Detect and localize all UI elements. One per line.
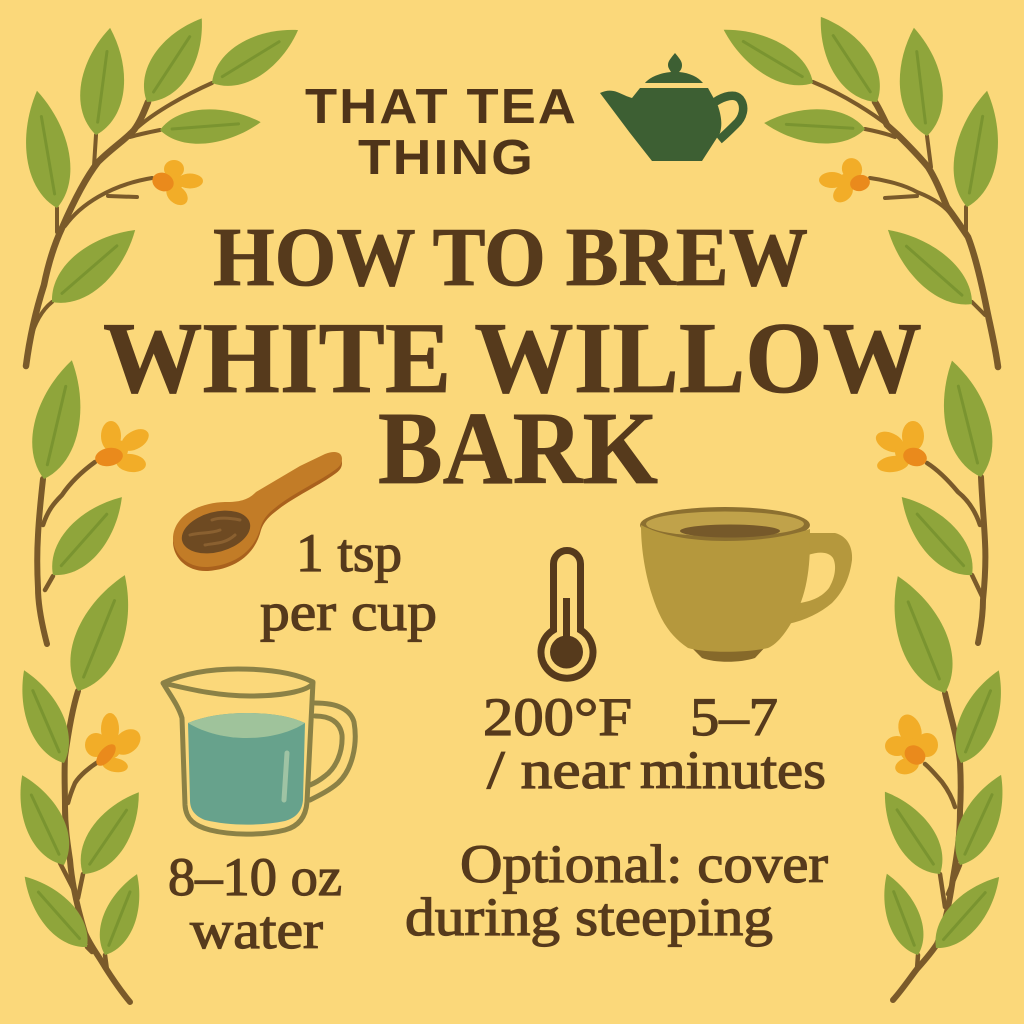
label: water amount: water (190, 900, 323, 960)
sprig: bottom right (869, 567, 1017, 1000)
icon: cup of tea (640, 507, 852, 662)
label: water amount (168, 847, 342, 960)
label: steeping time: 5–7 (690, 687, 778, 747)
sprig: top left (16, 7, 308, 366)
icon: wooden spoon (173, 452, 342, 571)
heading: bark: BARK (378, 391, 658, 506)
brand name: THING (358, 131, 535, 185)
sprig: bottom left (5, 566, 154, 1002)
icon: teapot (600, 53, 743, 161)
brand name: THAT TEA (305, 80, 578, 134)
label: temperature: 200°F (483, 687, 632, 747)
sprig: middle right (873, 355, 1002, 643)
label: steeping time: minutes (640, 740, 826, 800)
label: 1 tsp per cup: 1 tsp (296, 523, 402, 583)
note: optional cover: during steeping (405, 887, 773, 947)
note: optional cover: Optional: cover (460, 834, 828, 894)
heading: how to brew: HOW TO BREW (213, 211, 808, 304)
sprig: top right (715, 6, 1008, 367)
note: optional cover (405, 834, 828, 947)
sprig: middle left (23, 355, 152, 644)
label: 1 tsp per cup: per cup (260, 582, 437, 642)
label: temperature: / near (487, 740, 630, 800)
label: water amount: 8–10 oz (168, 847, 342, 907)
icon: measuring cup of water (163, 669, 355, 834)
heading: white willow: WHITE WILLOW (103, 302, 922, 415)
label: temperature (483, 687, 632, 800)
icon: thermometer (541, 550, 593, 678)
label: steeping time (640, 687, 826, 800)
brand name (305, 80, 578, 185)
label: 1 tsp per cup (260, 523, 437, 642)
